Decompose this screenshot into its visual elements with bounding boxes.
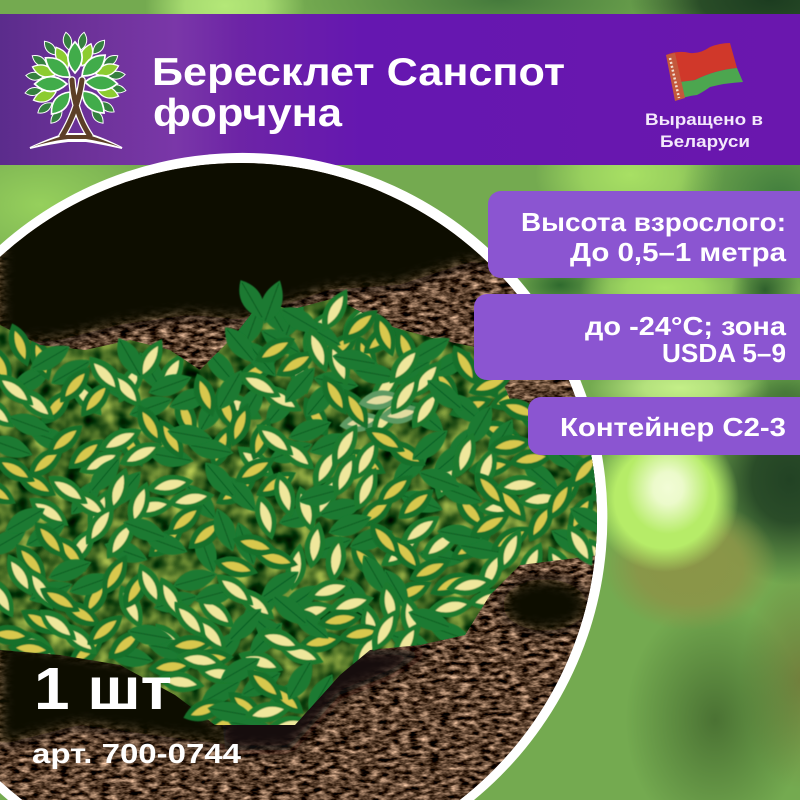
panel: container: Контейнер С2-3 (560, 412, 786, 442)
caption: grown in Belarus (645, 110, 763, 151)
tree crown leaves (24, 32, 127, 126)
panel: height (488, 191, 800, 278)
panel: height: Высота взрослого: (521, 207, 786, 237)
panel: container (528, 397, 800, 455)
soil and mulch (0, 150, 610, 800)
title: форчуна (153, 92, 342, 135)
panel: hardiness: USDA 5–9 (662, 338, 786, 368)
caption: grown in Belarus: Выращено в (645, 110, 763, 129)
panel: hardiness (474, 294, 800, 380)
logo: tree (24, 32, 127, 148)
panel: hardiness: до -24°C; зона (585, 311, 787, 341)
article number: арт. 700-0744 (32, 738, 241, 769)
panel: height: До 0,5–1 метра (570, 237, 787, 267)
round plant photo (0, 150, 636, 800)
icon: Belarus flag (666, 43, 743, 101)
caption: grown in Belarus: Беларуси (660, 132, 750, 151)
tree trunk (30, 80, 122, 148)
foliage (0, 280, 597, 725)
title (152, 51, 565, 135)
title: Бересклет Санспот (152, 51, 565, 94)
purple header band (0, 14, 800, 165)
quantity label: 1 шт (34, 656, 172, 722)
